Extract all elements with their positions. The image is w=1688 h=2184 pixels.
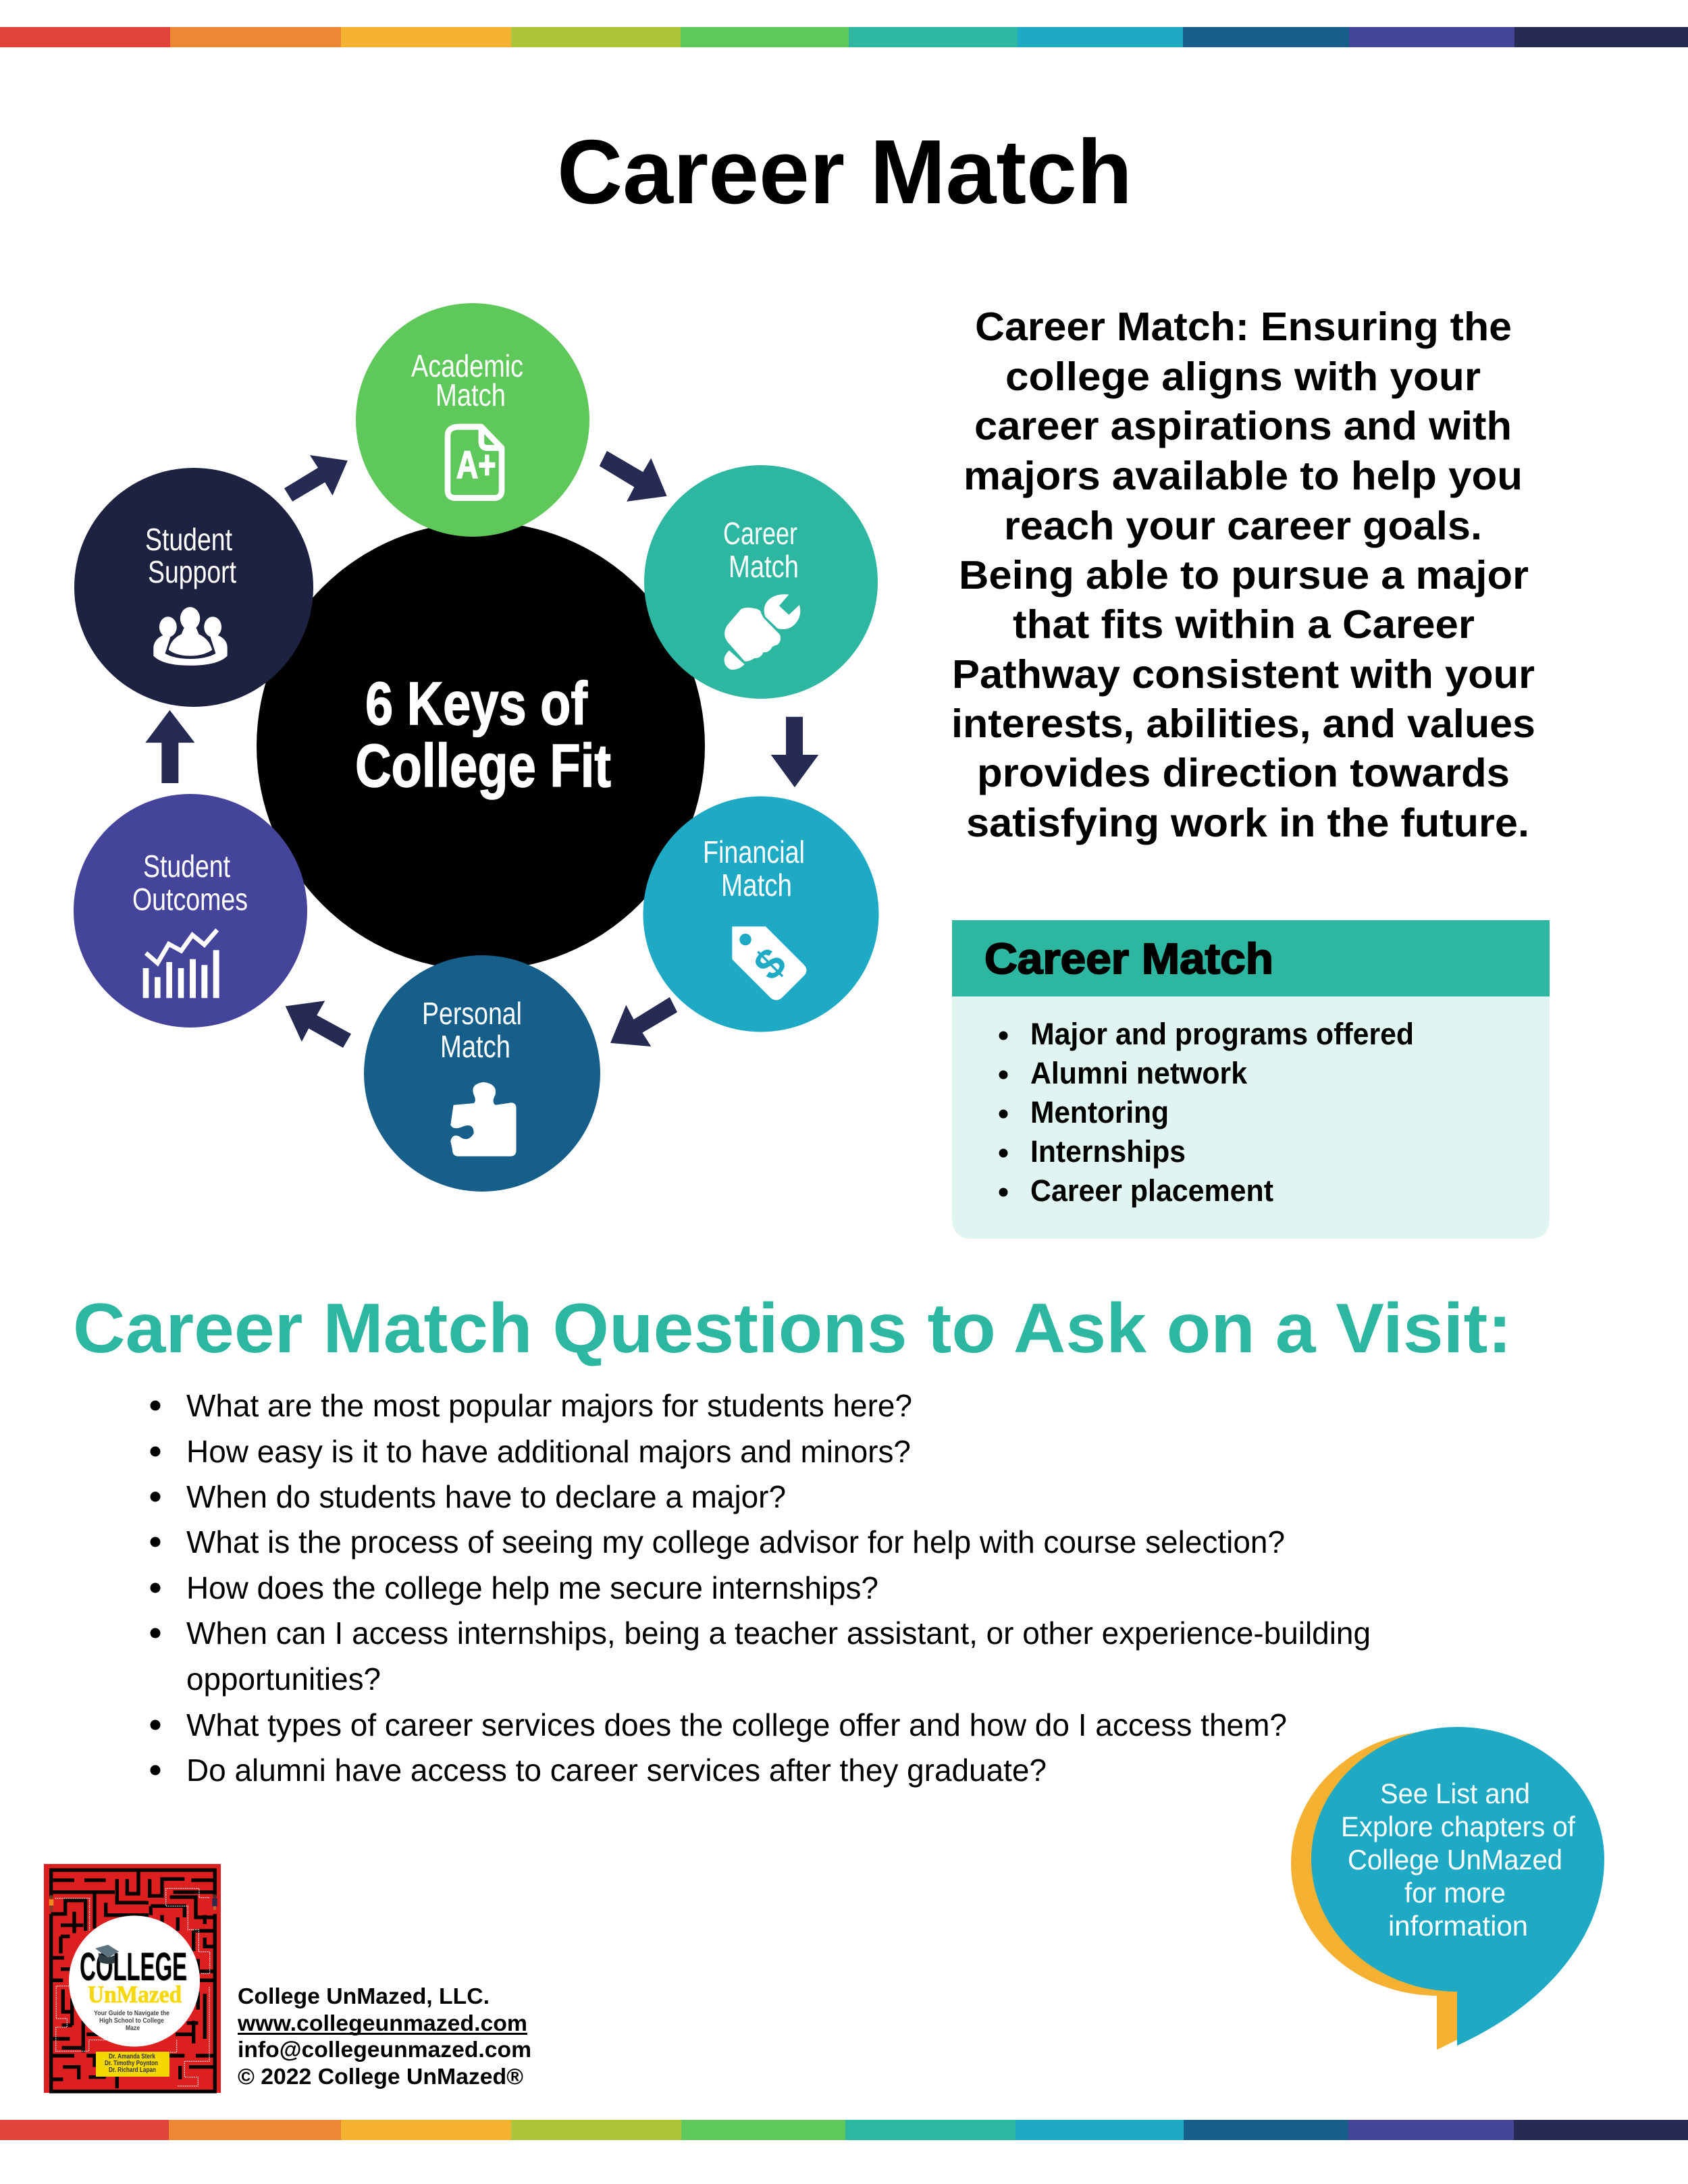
footer contact text: info@collegeunmazed.com (238, 2037, 531, 2062)
panel: career match factors (952, 920, 1550, 1239)
career match description paragraph: reach your career goals. (1004, 504, 1482, 548)
book cover: College UnMazed: Dr. Timothy Poynton (105, 2060, 158, 2067)
key: student outcomes (74, 794, 307, 1028)
book cover: College UnMazed (44, 1864, 221, 2093)
book cover: College UnMazed: Dr. Richard Lapan (109, 2067, 156, 2074)
key: academic match (356, 303, 589, 537)
title: Career Match (557, 121, 1132, 223)
questions list: What types of career services does the college offer and how do I access them? (186, 1707, 1287, 1742)
questions list: What is the process of seeing my college advisor for help with course selection? (186, 1524, 1285, 1560)
callout: speech bubble: information (1388, 1910, 1528, 1942)
factors list: Career placement (1030, 1173, 1273, 1208)
questions list: Do alumni have access to career services after they graduate? (186, 1753, 1047, 1788)
panel header: Career Match (984, 934, 1273, 983)
center circle: 6 Keys of (365, 670, 588, 738)
key: financial match: $ (745, 939, 795, 989)
footer contact text: © 2022 College UnMazed® (238, 2064, 523, 2089)
career match description paragraph: satisfying work in the future. (966, 801, 1529, 845)
top rainbow bar (0, 27, 1688, 47)
book cover: College UnMazed: UnMazed (88, 1981, 182, 2008)
key: student support: Student (145, 522, 232, 557)
figures on the maze (49, 1894, 217, 1911)
callout: speech bubble: College UnMazed (1348, 1844, 1562, 1875)
career match description paragraph: provides direction towards (977, 751, 1510, 795)
bottom rainbow bar (0, 2120, 1688, 2140)
arrows between keys (145, 451, 818, 1048)
footer contact text (237, 1983, 531, 2089)
callout: speech bubble: See List and (1380, 1778, 1530, 1809)
key: career match (644, 465, 878, 699)
career match description paragraph: Pathway consistent with your (952, 652, 1535, 697)
questions list: When do students have to declare a major? (186, 1479, 786, 1514)
key: academic match: Match (436, 377, 506, 412)
panel header (952, 920, 1550, 996)
questions list: How easy is it to have additional majors and minors? (186, 1434, 911, 1469)
factors list: Mentoring (1030, 1095, 1169, 1129)
career match description paragraph: that fits within a Career (1013, 602, 1475, 647)
questions list: How does the college help me secure internships? (186, 1570, 878, 1605)
career match description paragraph: interests, abilities, and values (951, 701, 1535, 746)
key: career match: Match (729, 549, 799, 584)
book cover: College UnMazed: Your Guide to Navigate the (94, 2010, 169, 2017)
career match description paragraph: Career Match: Ensuring the (975, 304, 1512, 349)
key: career match: Career (723, 516, 797, 551)
center circle: College Fit (355, 733, 611, 800)
key: personal match: Match (440, 1029, 510, 1064)
callout: speech bubble: Explore chapters of (1341, 1811, 1575, 1842)
footer contact text: College UnMazed, LLC. (238, 1983, 490, 2008)
key: financial match (643, 797, 879, 1032)
questions list: opportunities? (186, 1661, 381, 1697)
key: student outcomes: Outcomes (132, 882, 248, 917)
career match description paragraph: college aligns with your (1005, 354, 1481, 399)
key: financial match: Financial (703, 834, 805, 870)
career match description paragraph (951, 304, 1535, 845)
book cover: College UnMazed: High School to College (99, 2017, 164, 2025)
factors list: Internships (1030, 1134, 1186, 1169)
diagram: 6 keys of college fit (74, 303, 879, 1192)
questions list (150, 1388, 1371, 1788)
key: financial match: Match (721, 868, 792, 903)
footer contact text: www.collegeunmazed.com (237, 2010, 527, 2035)
questions list: What are the most popular majors for students here? (186, 1388, 912, 1423)
career match description paragraph: majors available to help you (964, 454, 1523, 498)
key: academic match: Academic (411, 348, 523, 383)
book cover: College UnMazed: COLLEGE (80, 1946, 188, 1990)
factors list: Major and programs offered (1030, 1017, 1414, 1051)
questions heading: Career Match Questions to Ask on a Visit: (73, 1289, 1512, 1368)
callout: speech bubble (1291, 1727, 1604, 2050)
book cover: College UnMazed: Maze (126, 2025, 140, 2032)
book cover: College UnMazed: Dr. Amanda Sterk (109, 2053, 155, 2060)
key: personal match: Personal (422, 996, 522, 1031)
key: student support: Support (148, 554, 236, 589)
center circle (257, 522, 705, 970)
callout: speech bubble: for more (1404, 1877, 1506, 1909)
book cover: College UnMazed: COLLEGE (80, 1945, 187, 1989)
factors list: Alumni network (1030, 1056, 1248, 1090)
key: academic match: A+ (456, 443, 496, 486)
graduation cap (95, 1945, 119, 1964)
key: student support (74, 468, 313, 707)
career match description paragraph: Being able to pursue a major (959, 553, 1529, 597)
key: student outcomes: Student (143, 849, 230, 884)
career match description paragraph: career aspirations and with (974, 404, 1512, 448)
factors list (999, 1017, 1414, 1208)
key: personal match (364, 955, 600, 1192)
questions list: When can I access internships, being a teacher assistant, or other experience-building (186, 1616, 1371, 1651)
